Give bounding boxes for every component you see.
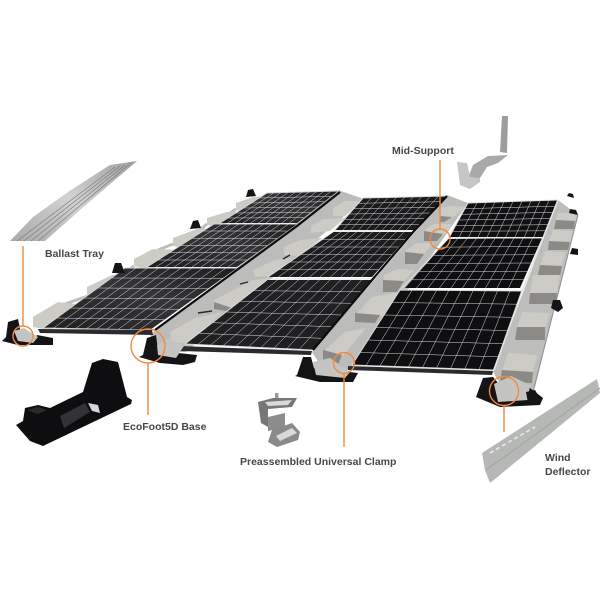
callout: mid-support: Mid-Support — [392, 145, 454, 157]
callout: ballast tray: Ballast Tray — [45, 248, 104, 260]
array feet — [2, 189, 578, 407]
roof rails and ballast trays — [62, 190, 578, 395]
left column of solar panels — [38, 191, 340, 335]
accessory: wind deflector — [482, 379, 600, 483]
middle column of solar panels — [180, 196, 447, 355]
callout: wind deflector — [490, 376, 591, 478]
accessory: mid-support — [457, 116, 508, 189]
callout: EcoFoot5D base — [123, 329, 207, 433]
concrete ballast blocks — [33, 195, 577, 383]
accessory: EcoFoot5D base — [16, 359, 132, 446]
accessory: preassembled universal clamp — [258, 393, 300, 447]
callout: mid-support — [392, 145, 454, 249]
right column of solar panels — [348, 200, 558, 375]
callout: preassembled universal clamp: Preassembled Universal Clamp — [240, 456, 396, 468]
accessory: ballast tray — [10, 161, 137, 241]
callout: EcoFoot5D base: EcoFoot5D Base — [123, 421, 207, 433]
callout: wind deflector: Wind — [545, 452, 571, 464]
callout: wind deflector: Deflector — [545, 466, 591, 478]
callout: ballast tray — [13, 246, 104, 346]
callout: preassembled universal clamp — [240, 352, 396, 468]
